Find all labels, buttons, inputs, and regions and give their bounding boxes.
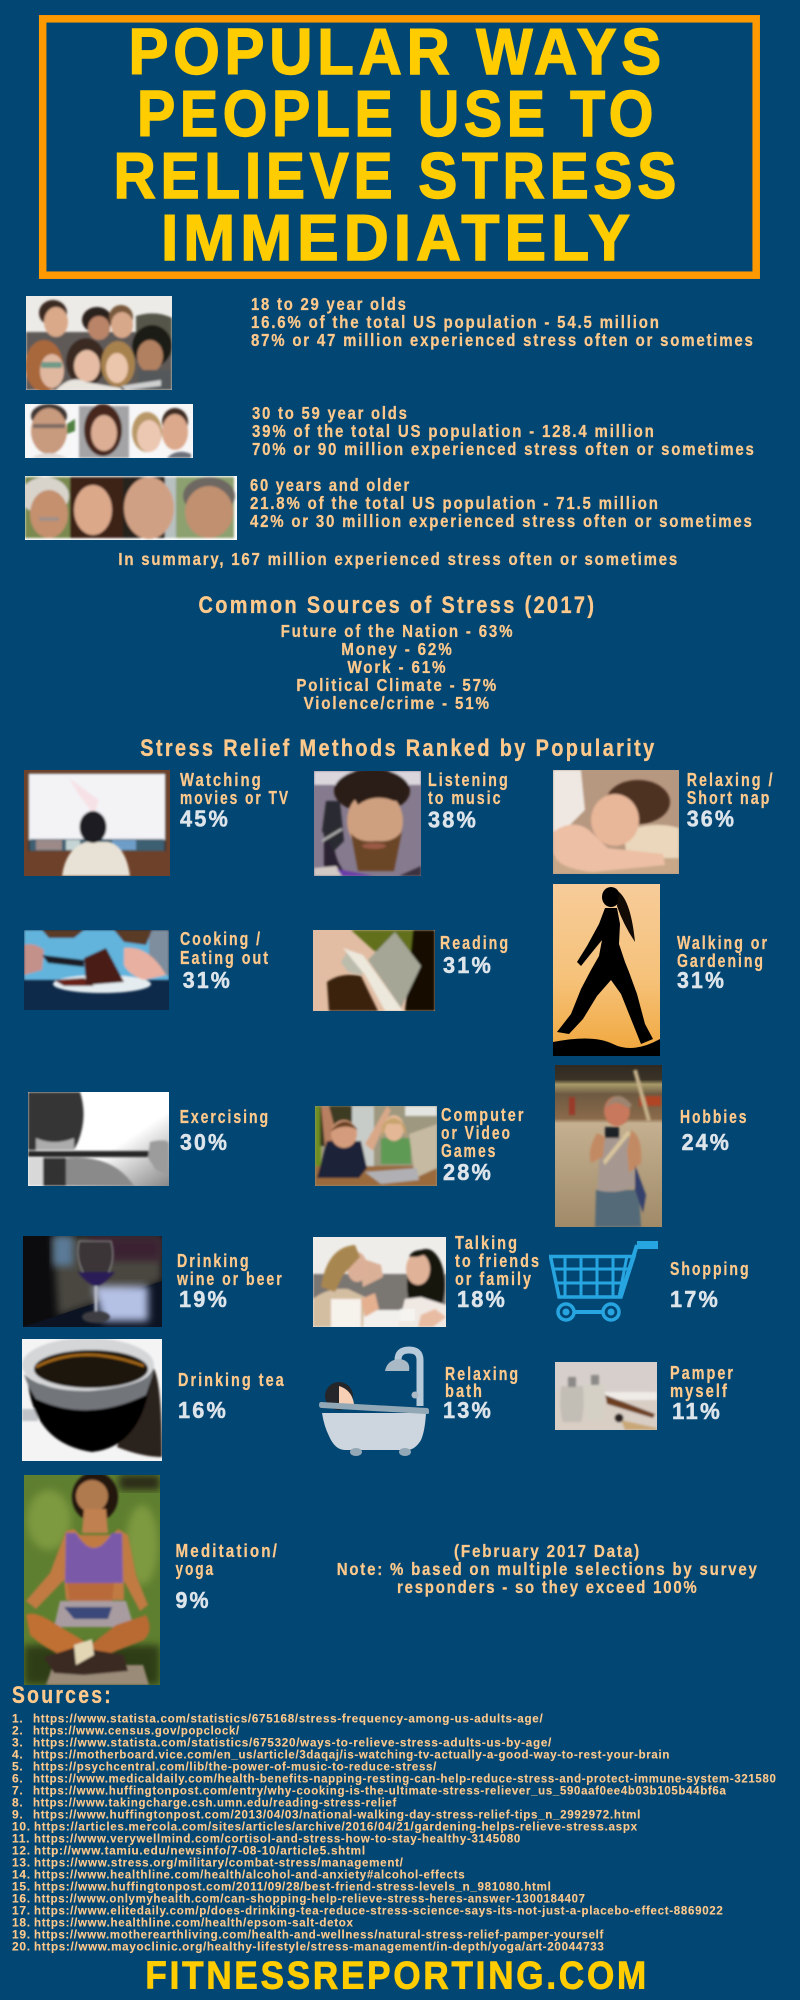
text: computer or video games label: 28% [443, 1159, 493, 1185]
list: source URLs: https://www.motherearthliving.com/health-and-wellness/natural-stress-relief-pamper-yourself [34, 1928, 604, 1942]
list: sources of stress: Future of the Nation - 63% [281, 621, 514, 641]
list: source URLs: https://www.onlymyhealth.com/can-shopping-help-relieve-stress-heres-answer-1300184407 [34, 1892, 586, 1906]
note [337, 1541, 759, 1597]
photo: open book in hand [313, 930, 435, 1011]
text: relaxing / short nap label: Short nap [687, 788, 771, 808]
text: listening to music label: Listening [428, 770, 510, 790]
text: relaxing / short nap label: Relaxing / [687, 770, 774, 790]
list: source URLs: 12. [12, 1844, 31, 1858]
text: cooking / eating out label: 31% [183, 967, 232, 993]
panel: listening to music [314, 769, 510, 876]
panel: age 60 and older [21, 475, 754, 540]
list: source URLs: https://www.medicaldaily.com/health-benefits-napping-resting-can-help-reduce-stress-and-protect-immune-system-321580 [33, 1772, 776, 1786]
list: source URLs: 6. [12, 1772, 23, 1786]
list: source URLs: 1. [12, 1712, 23, 1726]
text: relaxing bath label [443, 1364, 520, 1423]
photo: middle-aged adults [25, 404, 193, 458]
text: watching movies or TV label [180, 770, 290, 832]
list: source URLs: 19. [12, 1928, 31, 1942]
list: sources of stress: Money - 62% [341, 639, 454, 659]
text: drinking wine or beer label: wine or beer [176, 1269, 284, 1289]
list: source URLs: https://www.statista.com/statistics/675168/stress-frequency-among-us-adults-age/ [33, 1712, 543, 1726]
text: relaxing / short nap label [687, 770, 774, 832]
panel: relaxing bath [319, 1350, 520, 1456]
text: listening to music label: 38% [428, 807, 478, 833]
list: source URLs: 5. [12, 1760, 23, 1774]
heading: sources: Sources: [12, 1682, 113, 1709]
list: source URLs: 13. [12, 1856, 31, 1870]
panel: meditation / yoga [24, 1472, 279, 1685]
list: source URLs: https://www.elitedaily.com/p/does-drinking-tea-reduce-stress-science-says-its-not-just-a-placebo-effect-8869022 [34, 1904, 724, 1918]
text: relaxing bath label: Relaxing [445, 1364, 520, 1384]
text: drinking tea label: Drinking tea [178, 1370, 286, 1390]
panel: pamper myself [555, 1362, 735, 1430]
list: source URLs: https://www.census.gov/popclock/ [33, 1724, 240, 1738]
text: age 18 to 29 stats: 18 to 29 year olds [251, 294, 408, 314]
panel: shopping [550, 1241, 750, 1320]
panel: cooking / eating out [24, 929, 270, 1010]
text: computer or video games label: Games [441, 1141, 497, 1161]
photo: silhouette of woman walking at sunset [553, 884, 660, 1056]
text: walking or gardening label: 31% [677, 967, 726, 993]
text: walking or gardening label: Walking or [677, 933, 769, 953]
text: drinking tea label: 16% [178, 1397, 228, 1423]
icon: shopping cart [549, 1241, 658, 1322]
text: computer or video games label: or Video [441, 1123, 512, 1143]
panel: age 18 to 29 [25, 294, 755, 392]
panel: hobbies [555, 1065, 748, 1227]
text: age 60 and older stats [250, 475, 754, 531]
panel: drinking wine or beer [23, 1236, 284, 1327]
photo: man with headphones [314, 771, 421, 876]
text: talking to friends or family label: Talking [455, 1233, 519, 1253]
panel: watching movies or TV [24, 770, 290, 876]
text: listening to music label: to music [428, 788, 502, 808]
panel: reading [313, 930, 510, 1011]
photo: older adults [25, 476, 237, 540]
panel: walking or gardening [553, 884, 769, 1056]
text: watching movies or TV label: 45% [180, 806, 230, 832]
text: shopping label [670, 1259, 750, 1312]
text: cooking / eating out label [180, 929, 270, 993]
title: PEOPLE USE TO [137, 77, 658, 150]
list: source URLs: https://www.healthline.com/health/alcohol-and-anxiety#alcohol-effects [34, 1868, 465, 1882]
list: source URLs: https://www.verywellmind.com/cortisol-and-stress-how-to-stay-healthy-3145080 [34, 1832, 521, 1846]
text: age 30 to 59 stats: 39% of the total US population - 128.4 million [252, 421, 656, 441]
photo: chocolate cake [24, 930, 169, 1010]
list: source URLs [12, 1712, 776, 1954]
photo: bottles and brushes [555, 1362, 657, 1430]
text: relaxing bath label: 13% [443, 1397, 493, 1423]
text: exercising label: 30% [180, 1129, 229, 1155]
list: source URLs: http://www.tamiu.edu/newsinfo/7-08-10/article5.shtml [34, 1844, 366, 1858]
text: relaxing / short nap label: 36% [687, 806, 736, 832]
text: hobbies label [680, 1107, 748, 1155]
list: source URLs: 17. [12, 1904, 31, 1918]
panel: exercising [28, 1092, 270, 1186]
list: sources of stress: Violence/crime - 51% [304, 693, 491, 713]
list: sources of stress [281, 621, 514, 713]
text: talking to friends or family label [455, 1233, 541, 1312]
list: source URLs: 3. [12, 1736, 23, 1750]
list: source URLs: 10. [12, 1820, 31, 1834]
text: meditation yoga label: 9% [176, 1587, 211, 1613]
text: summary: In summary, 167 million experienced stress often or sometimes [118, 549, 679, 569]
list: source URLs: 20. [12, 1940, 31, 1954]
text: drinking wine or beer label [176, 1251, 284, 1312]
photo: group of young adults [26, 296, 172, 390]
list: source URLs: https://www.statista.com/statistics/675320/ways-to-relieve-stress-adults-us-by-age/ [33, 1736, 552, 1750]
title: IMMEDIATELY [161, 201, 635, 274]
list: source URLs: https://www.healthline.com/health/epsom-salt-detox [34, 1916, 354, 1930]
panel: drinking tea [22, 1338, 286, 1461]
text: computer or video games label [441, 1105, 526, 1185]
list: source URLs: https://www.huffingtonpost.com/2013/04/03/national-walking-day-stress-relief-tips_n_2992972.html [33, 1808, 641, 1822]
list: source URLs: 2. [12, 1724, 23, 1738]
list: source URLs: 7. [12, 1784, 23, 1798]
list: source URLs: https://www.stress.org/military/combat-stress/management/ [34, 1856, 404, 1870]
text: drinking tea label [178, 1370, 286, 1423]
photo: person watching TV [24, 770, 170, 876]
text: meditation yoga label [176, 1541, 279, 1613]
list: sources of stress: Work - 61% [347, 657, 447, 677]
text: age 18 to 29 stats [251, 294, 755, 350]
list: source URLs: https://www.takingcharge.csh.umn.edu/reading-stress-relief [33, 1796, 397, 1810]
text: watching movies or TV label: movies or TV [180, 788, 290, 808]
photo: glass of dark tea [22, 1339, 162, 1461]
text: listening to music label [428, 770, 510, 833]
panel: relaxing / short nap [553, 770, 774, 874]
list: source URLs: https://www.huffingtonpost.com/entry/why-cooking-is-the-ultimate-stress-reliever_us_590aaf0ee4b03b105b44bf6a [33, 1784, 726, 1798]
list: source URLs: 15. [12, 1880, 31, 1894]
photo: woman with camera [555, 1065, 662, 1227]
text: pamper myself label: 11% [672, 1398, 722, 1424]
text: exercising label [180, 1107, 270, 1155]
text: exercising label: Exercising [180, 1107, 270, 1127]
text: age 60 and older stats: 60 years and older [250, 475, 411, 495]
text: reading label: 31% [443, 952, 493, 978]
text: pamper myself label [670, 1363, 735, 1424]
panel: talking to friends or family [313, 1233, 541, 1327]
list: source URLs: 4. [12, 1748, 23, 1762]
title: RELIEVE STRESS [114, 139, 681, 212]
text: watching movies or TV label: Watching [180, 770, 263, 790]
text: age 30 to 59 stats: 30 to 59 year olds [252, 403, 409, 423]
list: source URLs: 14. [12, 1868, 31, 1882]
photo: woman sleeping [553, 770, 679, 874]
panel: age 30 to 59 [25, 403, 756, 459]
text: age 30 to 59 stats [252, 403, 756, 459]
list: source URLs: 9. [12, 1808, 23, 1822]
text: drinking wine or beer label: Drinking [177, 1251, 250, 1271]
text: walking or gardening label [677, 933, 769, 993]
list: source URLs: 16. [12, 1892, 31, 1906]
text: pamper myself label: myself [670, 1381, 729, 1401]
text: reading label: Reading [440, 933, 510, 953]
photo: kids at laptop [315, 1106, 437, 1186]
text: meditation yoga label: Meditation/ [176, 1541, 279, 1561]
heading: stress relief methods: Stress Relief Methods Ranked by Popularity [140, 735, 657, 762]
photo: woman meditating [24, 1475, 160, 1685]
text: hobbies label: Hobbies [680, 1107, 748, 1127]
text: talking to friends or family label: or family [455, 1269, 533, 1289]
list: sources of stress: Political Climate - 57% [296, 675, 498, 695]
text: reading label [440, 933, 510, 978]
list: source URLs: https://www.huffingtonpost.com/2011/09/28/best-friend-stress-levels_n_981080.html [34, 1880, 552, 1894]
text: pamper myself label: Pamper [670, 1363, 735, 1383]
list: source URLs: 11. [12, 1832, 30, 1846]
text: shopping label: Shopping [670, 1259, 750, 1279]
text: walking or gardening label: Gardening [677, 951, 765, 971]
note: responders - so they exceed 100% [397, 1577, 698, 1597]
list: source URLs: https://www.mayoclinic.org/healthy-lifestyle/stress-management/in-depth/yoga/art-20044733 [34, 1940, 605, 1954]
icon: bathtub with shower [319, 1346, 429, 1456]
text: talking to friends or family label: to friends [455, 1251, 541, 1271]
text: age 18 to 29 stats: 16.6% of the total US population - 54.5 million [251, 312, 661, 332]
panel: computer or video games [315, 1105, 526, 1186]
text: talking to friends or family label: 18% [457, 1286, 507, 1312]
heading: common sources of stress: Common Sources of Stress (2017) [198, 592, 596, 619]
footer: website name: FITNESSREPORTING.COM [145, 1955, 649, 1998]
photo: barbell on shoulders [28, 1092, 169, 1186]
list: source URLs: 8. [12, 1796, 23, 1810]
text: cooking / eating out label: Cooking / [180, 929, 262, 949]
list: source URLs: https://motherboard.vice.com/en_us/article/3daqaj/is-watching-tv-actually-a-good-way-to-rest-your-brain [33, 1748, 670, 1762]
list: source URLs: https://psychcentral.com/lib/the-power-of-music-to-reduce-stress/ [33, 1760, 437, 1774]
text: relaxing bath label: bath [445, 1381, 484, 1401]
text: cooking / eating out label: Eating out [180, 948, 270, 968]
text: drinking wine or beer label: 19% [179, 1286, 229, 1312]
text: hobbies label: 24% [682, 1129, 731, 1155]
text: age 60 and older stats: 21.8% of the total US population - 71.5 million [250, 493, 660, 513]
note: (February 2017 Data) [454, 1541, 641, 1561]
text: meditation yoga label: yoga [176, 1559, 215, 1579]
title [43, 15, 756, 275]
list: source URLs: 18. [12, 1916, 31, 1930]
text: computer or video games label: Computer [441, 1105, 526, 1125]
photo: wine glass [23, 1236, 162, 1327]
photo: two women talking [313, 1237, 446, 1327]
title: POPULAR WAYS [128, 15, 666, 88]
text: shopping label: 17% [670, 1286, 720, 1312]
list: source URLs: https://articles.mercola.com/sites/articles/archive/2016/04/21/gardening-helps-relieve-stress.aspx [34, 1820, 638, 1834]
